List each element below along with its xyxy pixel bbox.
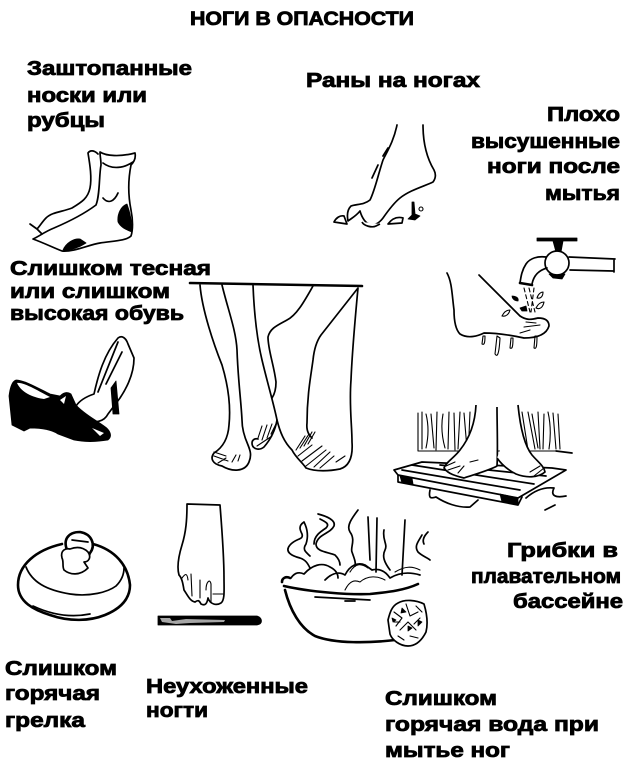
title: НОГИ В ОПАСНОСТИ [190, 9, 414, 30]
icon: darned socks [30, 151, 135, 251]
icon: wounded foot [334, 125, 435, 227]
label: hot water bottle: горячая [5, 683, 100, 705]
label: darned socks: Заштопанные [27, 58, 192, 80]
label: darned socks: рубцы [27, 110, 105, 132]
label: pool fungus: Грибки в [507, 540, 618, 562]
label: tight or high shoes [10, 258, 211, 325]
icon: steaming bowl and sponge [282, 510, 430, 646]
label: pool fungus: плавательном [471, 566, 621, 588]
label: poorly dried feet [471, 104, 620, 205]
label: neglected nails: Неухоженные [146, 676, 308, 698]
label: poorly dried feet: Плохо [547, 104, 620, 126]
label: pool fungus [471, 540, 623, 613]
label: darned socks [27, 58, 192, 132]
icon: pool mat with feet [394, 405, 572, 510]
label: pool fungus: бассейне [513, 591, 623, 613]
label: tight or high shoes: Слишком тесная [10, 258, 211, 280]
label: tight or high shoes: или слишком [10, 281, 170, 303]
label: neglected nails [146, 676, 308, 722]
icon: tap with washing foot [447, 238, 615, 355]
label: hot foot-washing water [385, 688, 599, 760]
icon: hot water bottle [18, 532, 130, 620]
label: hot water bottle: грелка [5, 710, 86, 732]
label: hot water bottle: Слишком [5, 658, 117, 680]
label: poorly dried feet: высушенные [471, 131, 620, 153]
label: hot foot-washing water: горячая вода при [385, 714, 599, 736]
label: foot wounds: Раны на ногах [306, 70, 480, 92]
label: darned socks: носки или [27, 85, 147, 107]
label: hot foot-washing water: Слишком [385, 688, 497, 710]
icon: foot and nail file [158, 504, 262, 625]
icon: central legs [190, 283, 362, 471]
icon: shoes [9, 337, 134, 442]
label: tight or high shoes: высокая обувь [10, 303, 184, 325]
label: poorly dried feet: ноги после [487, 156, 620, 178]
label: hot water bottle [5, 658, 117, 732]
label: neglected nails: ногти [146, 700, 208, 722]
label: poorly dried feet: мытья [545, 183, 620, 205]
